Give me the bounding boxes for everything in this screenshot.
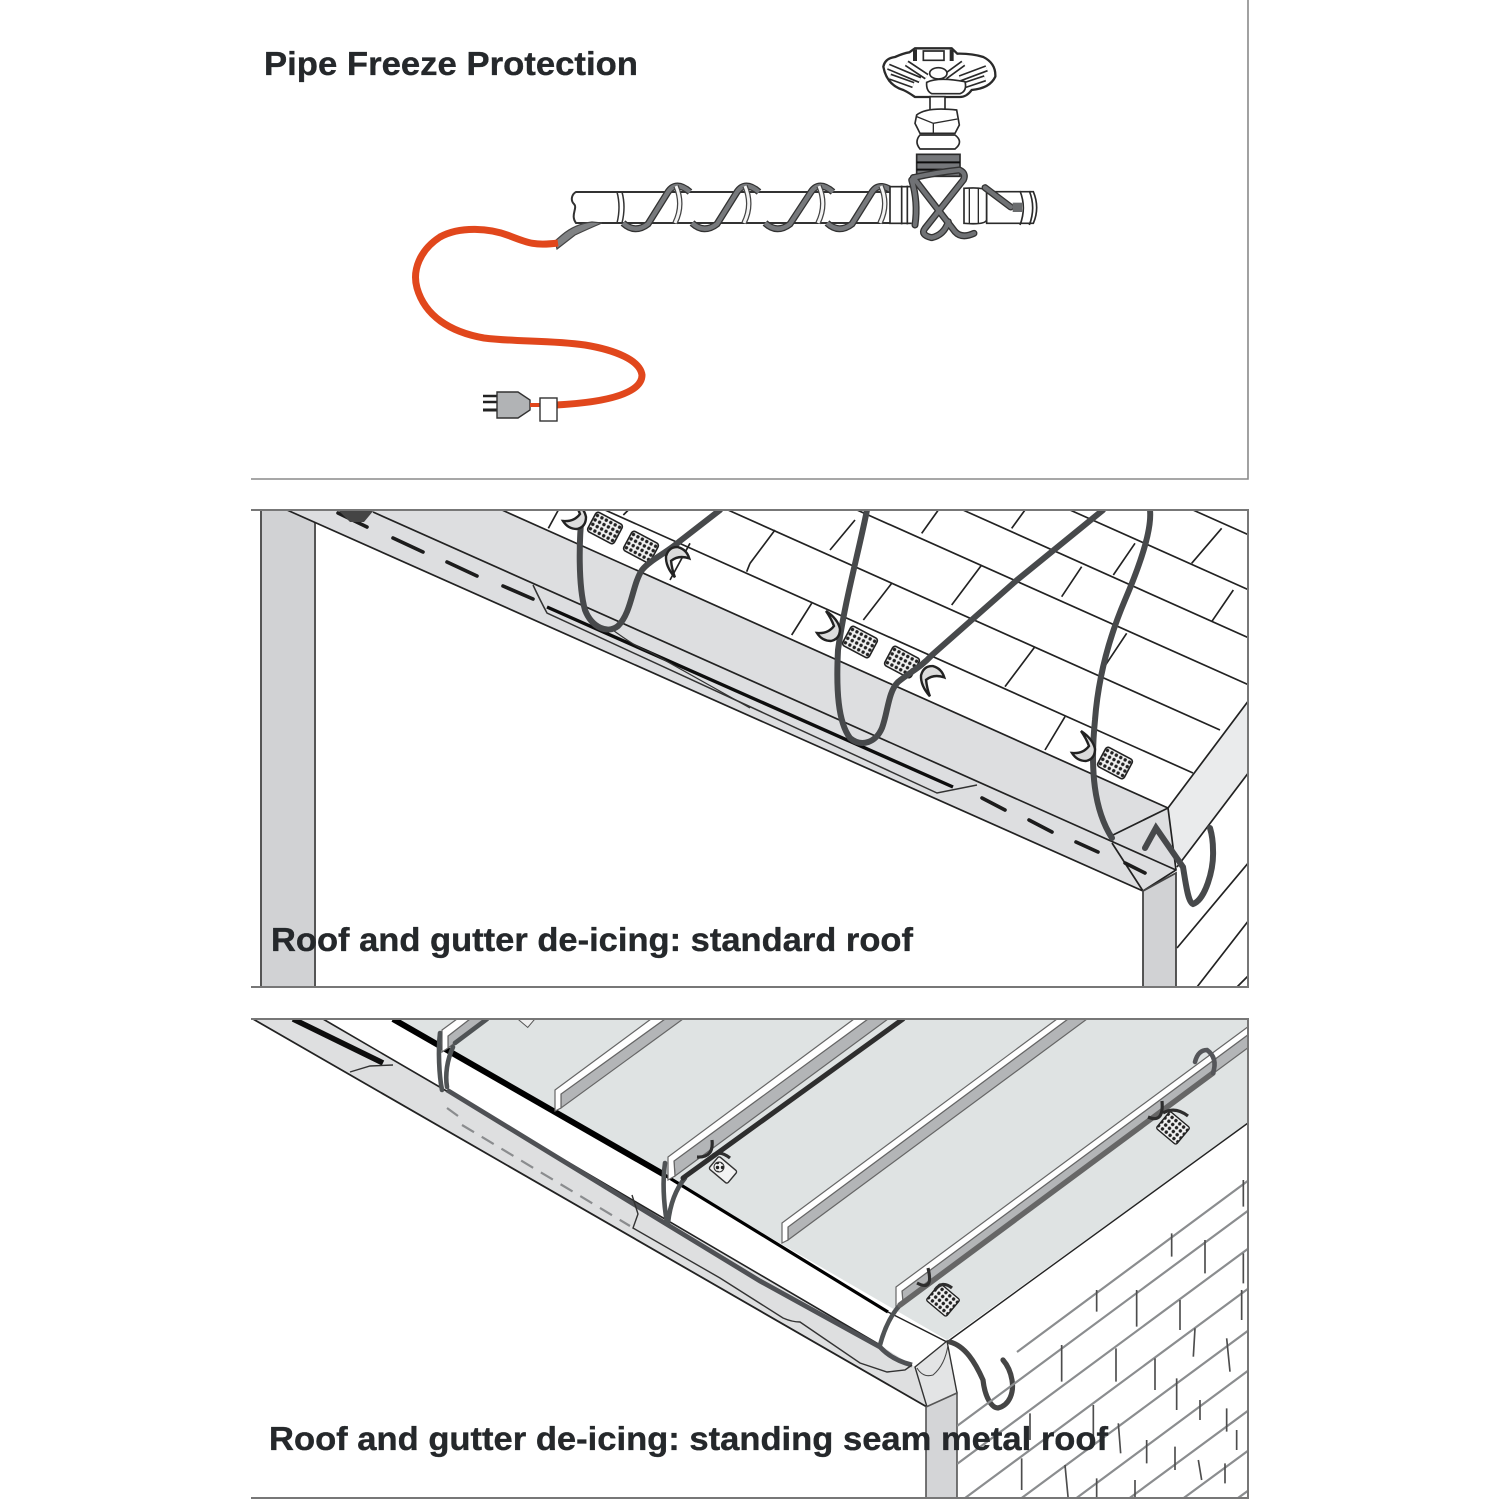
corner trim crease bbox=[917, 1345, 948, 1376]
shingle lines bbox=[287, 510, 1249, 987]
left coupling bbox=[890, 182, 967, 225]
brick joints bbox=[1022, 1180, 1243, 1500]
cable clips bbox=[697, 1101, 1188, 1290]
right coupling and outlet pipe bbox=[964, 188, 1037, 225]
valve bbox=[883, 48, 1037, 238]
cutaway flap bbox=[350, 1065, 393, 1072]
dashed slots bbox=[447, 1108, 630, 1226]
mounting pads bbox=[519, 1011, 1190, 1317]
heating cable wrap on pipe bbox=[623, 186, 896, 229]
pipe bbox=[572, 192, 900, 223]
heating cable loops bbox=[580, 510, 1213, 904]
label: standing seam metal roof: Roof and gutter de-icing: standing seam metal roof bbox=[269, 1420, 1109, 1457]
heating cable along seams bbox=[439, 1019, 1215, 1408]
grey cable tail bbox=[555, 222, 602, 249]
panel: standing seam metal roof bbox=[251, 1011, 1249, 1500]
gutter cable run bbox=[447, 1090, 912, 1365]
handwheel bbox=[883, 48, 995, 97]
cable fixing at top left bbox=[339, 511, 373, 522]
orange power cord bbox=[416, 229, 642, 405]
panel frame bbox=[251, 510, 1248, 987]
cable clips bbox=[563, 499, 1095, 761]
shingle joints bbox=[548, 510, 1233, 750]
gutter cutaway top left bbox=[293, 1019, 383, 1063]
label: standard roof: Roof and gutter de-icing: standard roof bbox=[271, 921, 914, 958]
panel: standard roof bbox=[251, 499, 1249, 995]
fascia slots bbox=[338, 513, 1145, 873]
mounting pads bbox=[587, 511, 1133, 780]
standing seams bbox=[442, 1019, 1249, 1307]
metal roof surface bbox=[393, 1019, 1248, 1340]
roof edge band bbox=[287, 510, 1176, 891]
roof edge lines bbox=[253, 1019, 1248, 1407]
white gutter channel bbox=[753, 1228, 896, 1356]
corner trim bbox=[915, 1341, 957, 1407]
panel frame bbox=[251, 1019, 1248, 1498]
right post bbox=[1143, 873, 1176, 995]
flashing tear bbox=[632, 1195, 912, 1372]
corner post bbox=[926, 1393, 957, 1498]
panel: pipe freeze protection bbox=[251, 0, 1248, 479]
cable crossing valve body bbox=[912, 170, 1011, 238]
side return bbox=[1168, 700, 1249, 867]
brick courses bbox=[957, 1180, 1249, 1500]
left post bbox=[261, 505, 315, 995]
plug bbox=[483, 392, 557, 421]
fascia band bbox=[253, 1019, 927, 1407]
heading: pipe freeze protection: Pipe Freeze Protection bbox=[264, 45, 638, 82]
valve stem, nut and bonnet bbox=[915, 97, 960, 176]
gutter cutaway bbox=[533, 585, 977, 793]
